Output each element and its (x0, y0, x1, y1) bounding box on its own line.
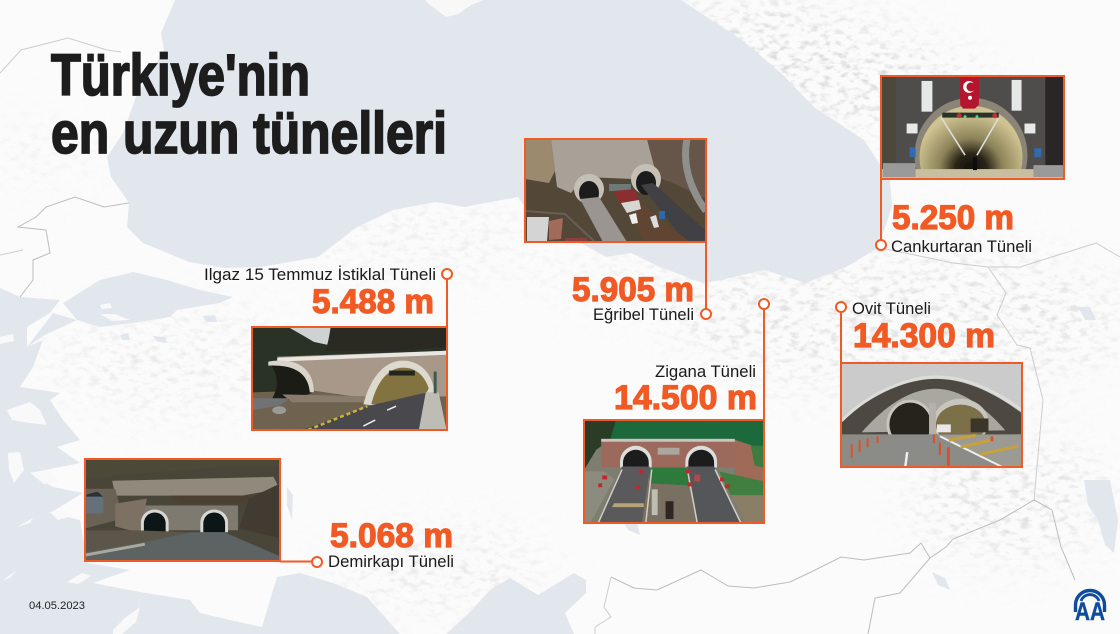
connector: Ilgaz (446, 279, 448, 327)
number: Zigana length: 14.500 m (614, 379, 757, 417)
label: Demirkapı tunnel name: Demirkapı Tüneli (328, 552, 454, 571)
marker: Ilgaz (442, 269, 452, 279)
photo: Eğribel tunnel (526, 140, 705, 241)
label: Ovit tunnel name: Ovit Tüneli (852, 299, 931, 318)
photo frame: Demirkapı (85, 459, 280, 561)
photo: Zigana tunnel (585, 421, 763, 522)
icon: AA logo: AA (1075, 598, 1105, 626)
number: Ovit length: 14.300 m (853, 317, 995, 355)
connector: Ovit (840, 312, 842, 363)
number: Ilgaz length: 5.488 m (312, 283, 434, 321)
label: Eğribel tunnel name: Eğribel Tüneli (593, 305, 694, 324)
number: Cankurtaran length: 5.250 m (892, 199, 1014, 237)
photo frame: Eğribel (525, 139, 706, 242)
connector: Zigana (763, 309, 765, 420)
panel: Demirkapı tunnel (85, 459, 454, 571)
connector: Cankurtaran (880, 179, 882, 240)
photo frame: Zigana (584, 420, 764, 523)
photo: Demirkapı tunnel (86, 460, 279, 560)
Black Sea (107, 0, 892, 283)
eastern Mediterranean (446, 573, 586, 634)
number: Demirkapı length: 5.068 m (330, 517, 453, 555)
marker: Cankurtaran (876, 240, 886, 250)
icon: AA logo (1075, 590, 1105, 626)
label: Cankurtaran tunnel name: Cankurtaran Tüneli (891, 237, 1032, 256)
photo: Ovit tunnel (842, 364, 1021, 466)
photo frame: Cankurtaran (881, 76, 1064, 179)
number: Eğribel length: 5.905 m (572, 271, 694, 309)
photo: Ilgaz tunnel (253, 328, 446, 429)
panel: Ilgaz tunnel (204, 265, 452, 430)
connector: Eğribel (705, 242, 707, 309)
label: Zigana tunnel name: Zigana Tüneli (655, 362, 756, 381)
marker: Demirkapı (312, 557, 322, 567)
panel: Eğribel tunnel (525, 139, 711, 324)
marker: Ovit (836, 302, 846, 312)
Aegean and western Mediterranean (0, 288, 400, 634)
islands (0, 303, 140, 634)
photo frame: Ilgaz (252, 327, 447, 430)
panel: Ovit tunnel (836, 299, 1022, 467)
date: 04.05.2023 (29, 600, 85, 612)
Sea of Marmara (27, 272, 233, 347)
title: en uzun tünelleri (51, 101, 447, 166)
Crimea (425, 0, 484, 17)
photo: Cankurtaran tunnel (882, 77, 1063, 178)
connector: Demirkapı (280, 560, 312, 562)
lakes (120, 307, 1118, 590)
panel: Zigana tunnel (584, 299, 769, 523)
photo frame: Ovit (841, 363, 1022, 467)
title (51, 43, 447, 166)
marker: Zigana (759, 299, 769, 309)
label: Ilgaz tunnel name: Ilgaz 15 Temmuz İstiklal Tüneli (204, 265, 436, 284)
title: Türkiye'nin (51, 43, 310, 108)
marker: Eğribel (701, 309, 711, 319)
panel: Cankurtaran tunnel (876, 76, 1064, 256)
